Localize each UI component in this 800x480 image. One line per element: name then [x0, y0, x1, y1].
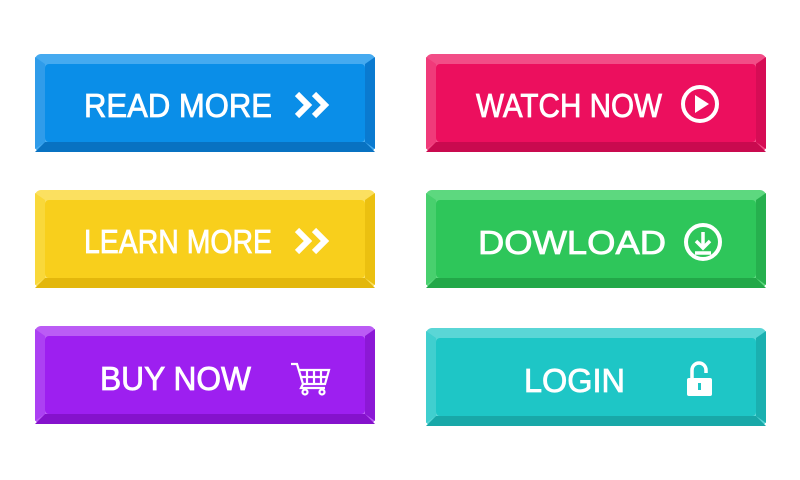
button: watch now: WATCH NOW: [476, 87, 663, 124]
button: download: DOWLOAD: [478, 224, 666, 261]
button: read more: READ MORE: [84, 87, 272, 124]
icon: double chevron: [297, 230, 325, 252]
button: learn more: [35, 190, 375, 288]
button: learn more: LEARN MORE: [84, 223, 272, 260]
icon: open padlock: [687, 363, 712, 396]
button: buy now: BUY NOW: [100, 360, 252, 397]
button: login: [426, 328, 766, 426]
icon: download circle: [686, 225, 720, 259]
icon: play circle: [683, 87, 717, 121]
button: watch now: [426, 54, 766, 152]
button: read more: [35, 54, 375, 152]
button: login: LOGIN: [524, 362, 625, 399]
button: buy now: [35, 326, 375, 424]
icon: double chevron: [297, 94, 325, 116]
icon: shopping cart: [291, 364, 329, 394]
button: download: [426, 190, 766, 288]
